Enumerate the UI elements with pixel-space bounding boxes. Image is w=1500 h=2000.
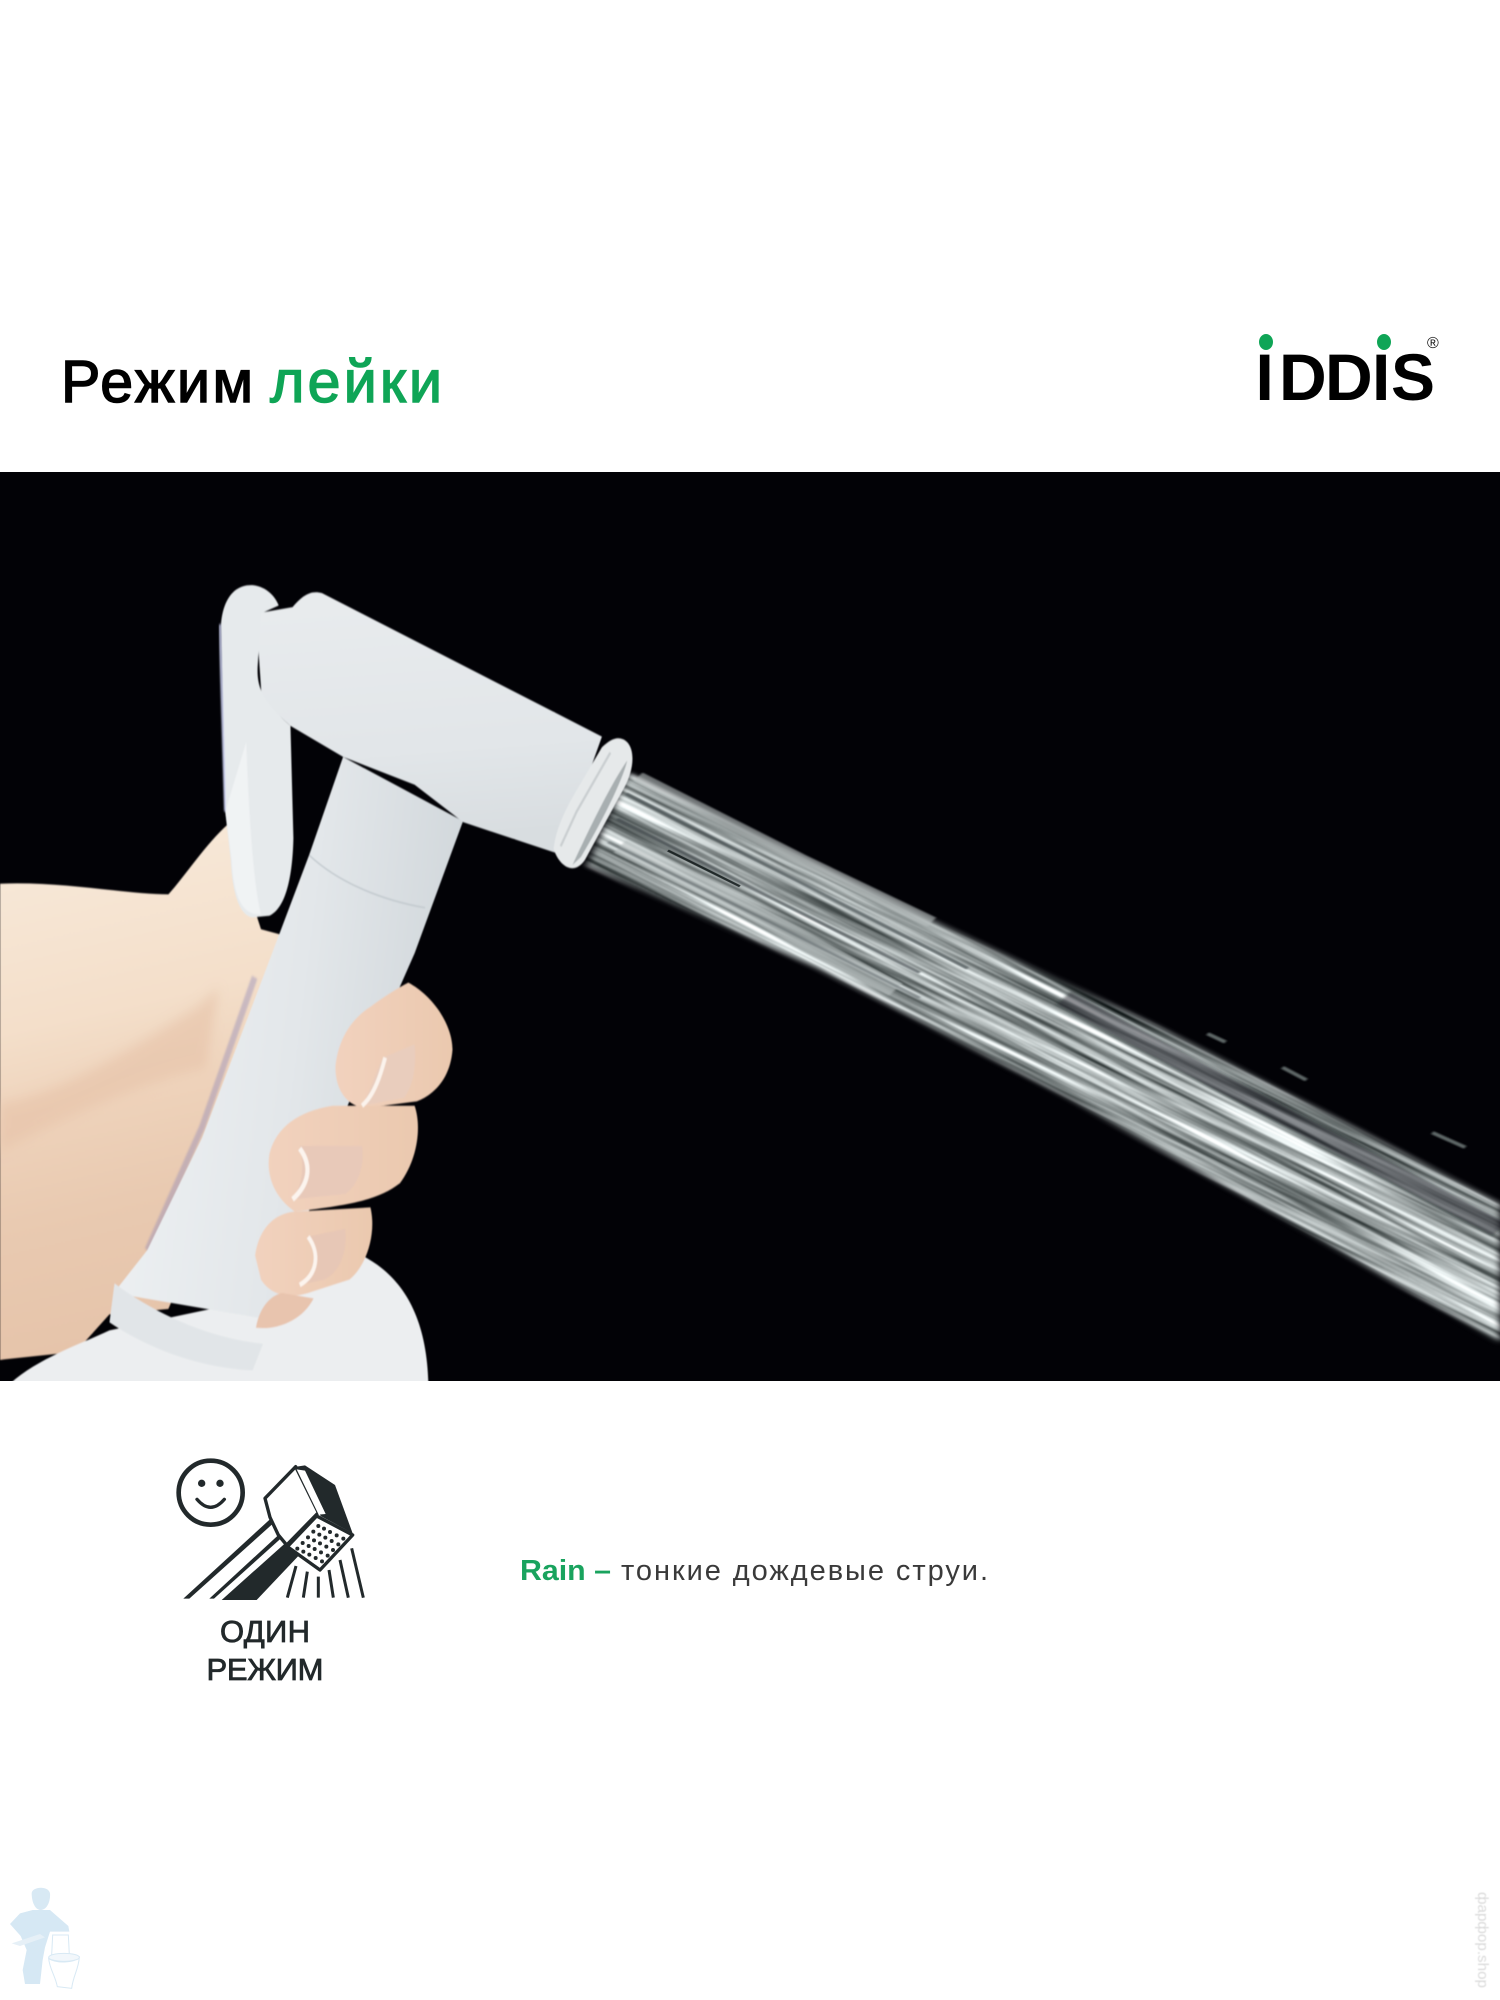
photo: hand holding hygienic shower with water spray (0, 472, 1500, 1381)
title: лейки (270, 349, 442, 415)
water spray (582, 770, 1500, 1344)
hand: knuckle crease (0, 988, 219, 1151)
title: Режим (61, 349, 253, 415)
shower handle (114, 757, 463, 1320)
logo: IDDIS: ® (1427, 335, 1439, 352)
handle joint line (309, 855, 425, 908)
trigger lever (220, 585, 293, 917)
description text: тонкие дождевые струи. (621, 1555, 988, 1587)
shower collar ring (109, 1283, 263, 1371)
hand and shower body (0, 585, 632, 1395)
hand: palm and index finger (0, 824, 280, 1361)
fingers gripping handle (255, 983, 452, 1328)
description text: Rain – (520, 1555, 611, 1587)
shower head barrel (256, 592, 602, 854)
watermark: vertical text: фарфор.shop (1474, 1892, 1491, 1988)
icon caption: ОДИН (220, 1614, 310, 1649)
watermark: plumber with toilet (10, 1888, 79, 1988)
icon caption (206, 1614, 324, 1687)
shower base disc (12, 1256, 430, 1381)
icon caption: РЕЖИМ (206, 1652, 324, 1687)
icon: smiley face (179, 1461, 243, 1525)
title (61, 349, 442, 415)
nozzle collar (554, 738, 632, 868)
logo: IDDIS: IDDIS (1256, 340, 1435, 414)
icon: shower head (183, 1465, 363, 1600)
hand: colour fringe along handle (147, 977, 255, 1250)
fingernails (293, 1044, 415, 1285)
icon: smile and shower head (179, 1461, 363, 1600)
